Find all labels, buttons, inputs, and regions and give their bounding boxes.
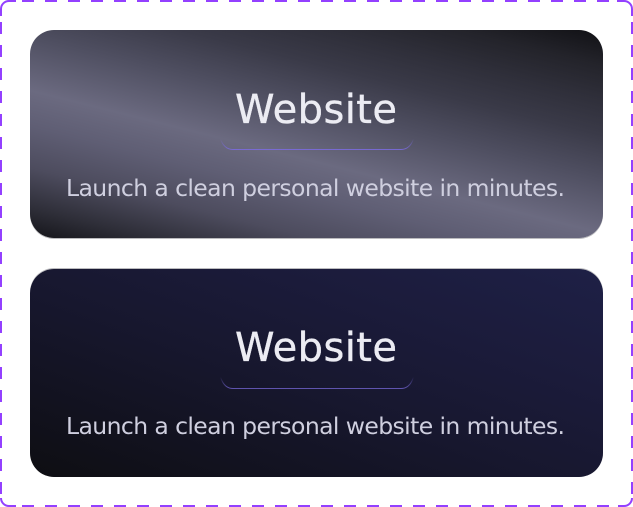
panel: light gradient card [30, 30, 603, 238]
title underline [220, 377, 414, 388]
title underline [220, 139, 414, 150]
heading: Website: Website [235, 87, 397, 133]
panel: dark gradient card [30, 269, 603, 477]
heading: Website: Website [235, 325, 397, 371]
description text: Launch a clean personal website in minutes. [66, 174, 565, 202]
description text: Launch a clean personal website in minutes. [66, 412, 565, 440]
